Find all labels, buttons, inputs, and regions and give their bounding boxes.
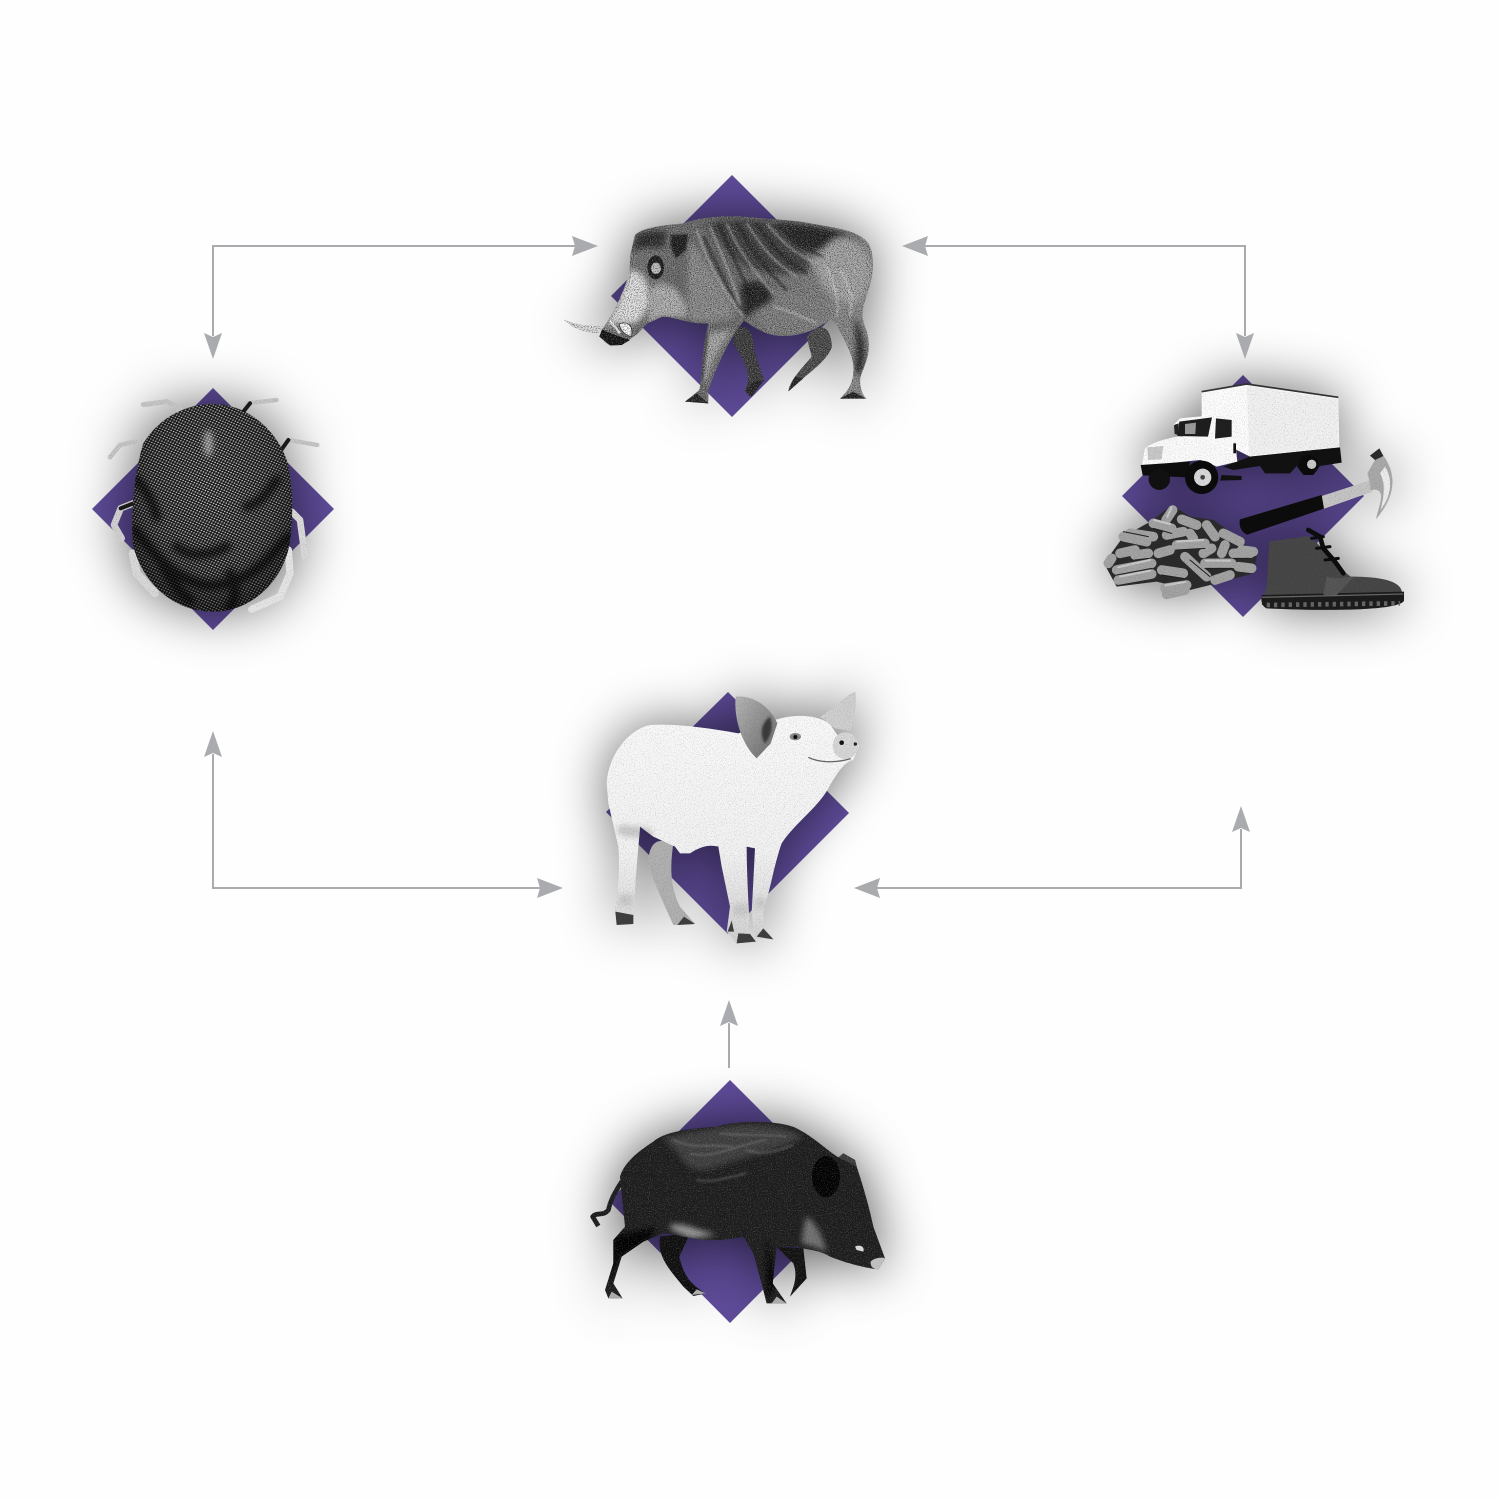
arrow: warthog and fomites: [902, 236, 1254, 359]
boot: [1261, 530, 1404, 610]
node: warthog: [563, 175, 873, 417]
transmission cycle diagram: [84, 175, 1428, 1326]
arrow: pig and fomites: [854, 806, 1250, 898]
image: warthog: [563, 216, 873, 403]
diamond: pig backdrop: [606, 692, 849, 934]
image: fomites: [1104, 384, 1404, 610]
diamond: wild boar backdrop: [609, 1080, 851, 1323]
diamond: tick backdrop: [92, 388, 334, 630]
node: wild boar: [593, 1080, 885, 1323]
arrow: pig and tick: [204, 731, 563, 898]
node: domestic pig: [606, 692, 859, 943]
node: fomites truck hammer pellets boot: [1104, 375, 1404, 617]
diamond: warthog backdrop: [611, 175, 853, 417]
diamond: fomites backdrop: [1122, 375, 1364, 617]
hammer: [1240, 448, 1393, 535]
node: tick: [92, 388, 334, 630]
arrow: wild boar to pig: [720, 1000, 738, 1068]
arrow: warthog and tick: [204, 236, 598, 359]
image: domestic pig: [607, 692, 859, 943]
image: wild boar: [593, 1122, 885, 1303]
truck: [1141, 384, 1342, 494]
pellets: [1104, 505, 1257, 594]
image: tick: [110, 400, 317, 612]
